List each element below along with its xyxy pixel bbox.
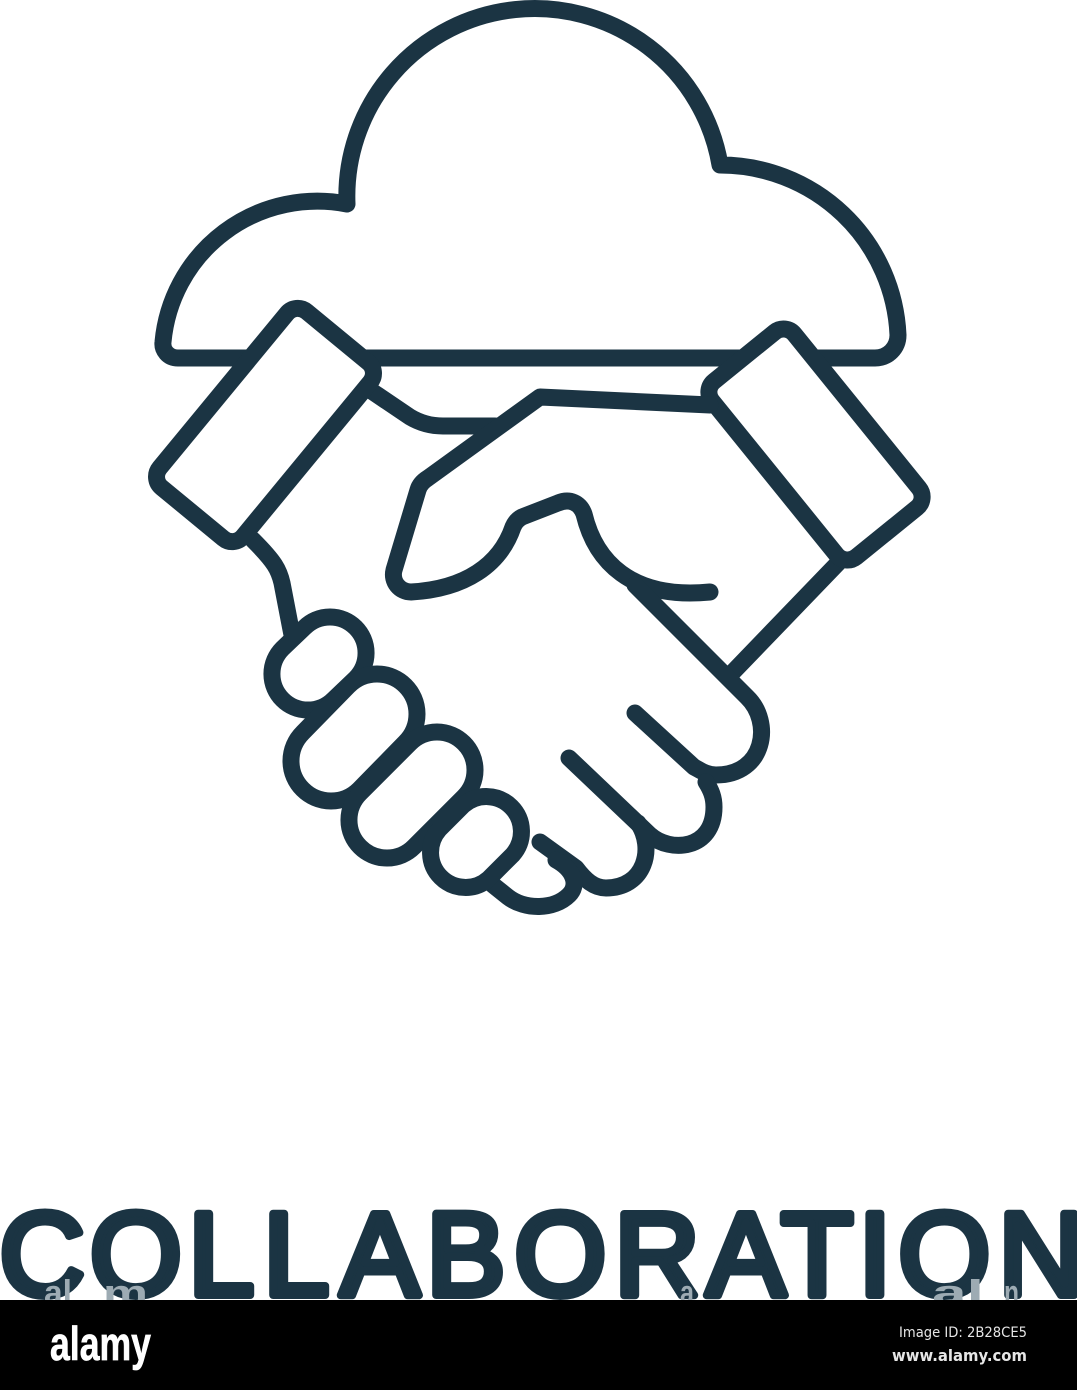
watermark fragments: n: [1004, 1274, 1019, 1312]
icon: left hand finger three: [349, 732, 475, 858]
icon: left hand finger two: [291, 674, 417, 801]
icon: right wrist: [733, 563, 838, 672]
icon: cloud: [163, 9, 898, 358]
icon: cloud and handshake: [151, 9, 928, 907]
icon: right shirt cuff: [703, 323, 928, 566]
icon: right hand outer edge and first finger: [635, 585, 762, 775]
footer logo: alamy: [50, 1317, 151, 1370]
icon: right hand third finger: [540, 823, 646, 888]
website url: www.alamy.com: [892, 1346, 1027, 1365]
title: COLLABORATION: [0, 1189, 1077, 1321]
watermark fragments: m: [103, 1274, 148, 1312]
icon: left shirt cuff: [151, 303, 379, 547]
icon: left hand finger four: [431, 797, 521, 887]
watermark fragments: [44, 1274, 1019, 1312]
watermark fragments: al: [932, 1274, 984, 1312]
icon: left hand top edge: [370, 390, 495, 426]
watermark fragments: al: [44, 1274, 72, 1312]
footer bar: [0, 1300, 1077, 1390]
icon: left hand finger one: [272, 617, 366, 710]
image id: Image ID: 2B28CE5: [899, 1325, 1027, 1341]
icon: right hand with thumb: [393, 397, 710, 593]
icon: left wrist: [253, 540, 292, 635]
watermark fragments: a: [680, 1274, 695, 1312]
icon: right hand second finger: [569, 758, 714, 845]
icon: right hand little finger: [493, 860, 574, 907]
